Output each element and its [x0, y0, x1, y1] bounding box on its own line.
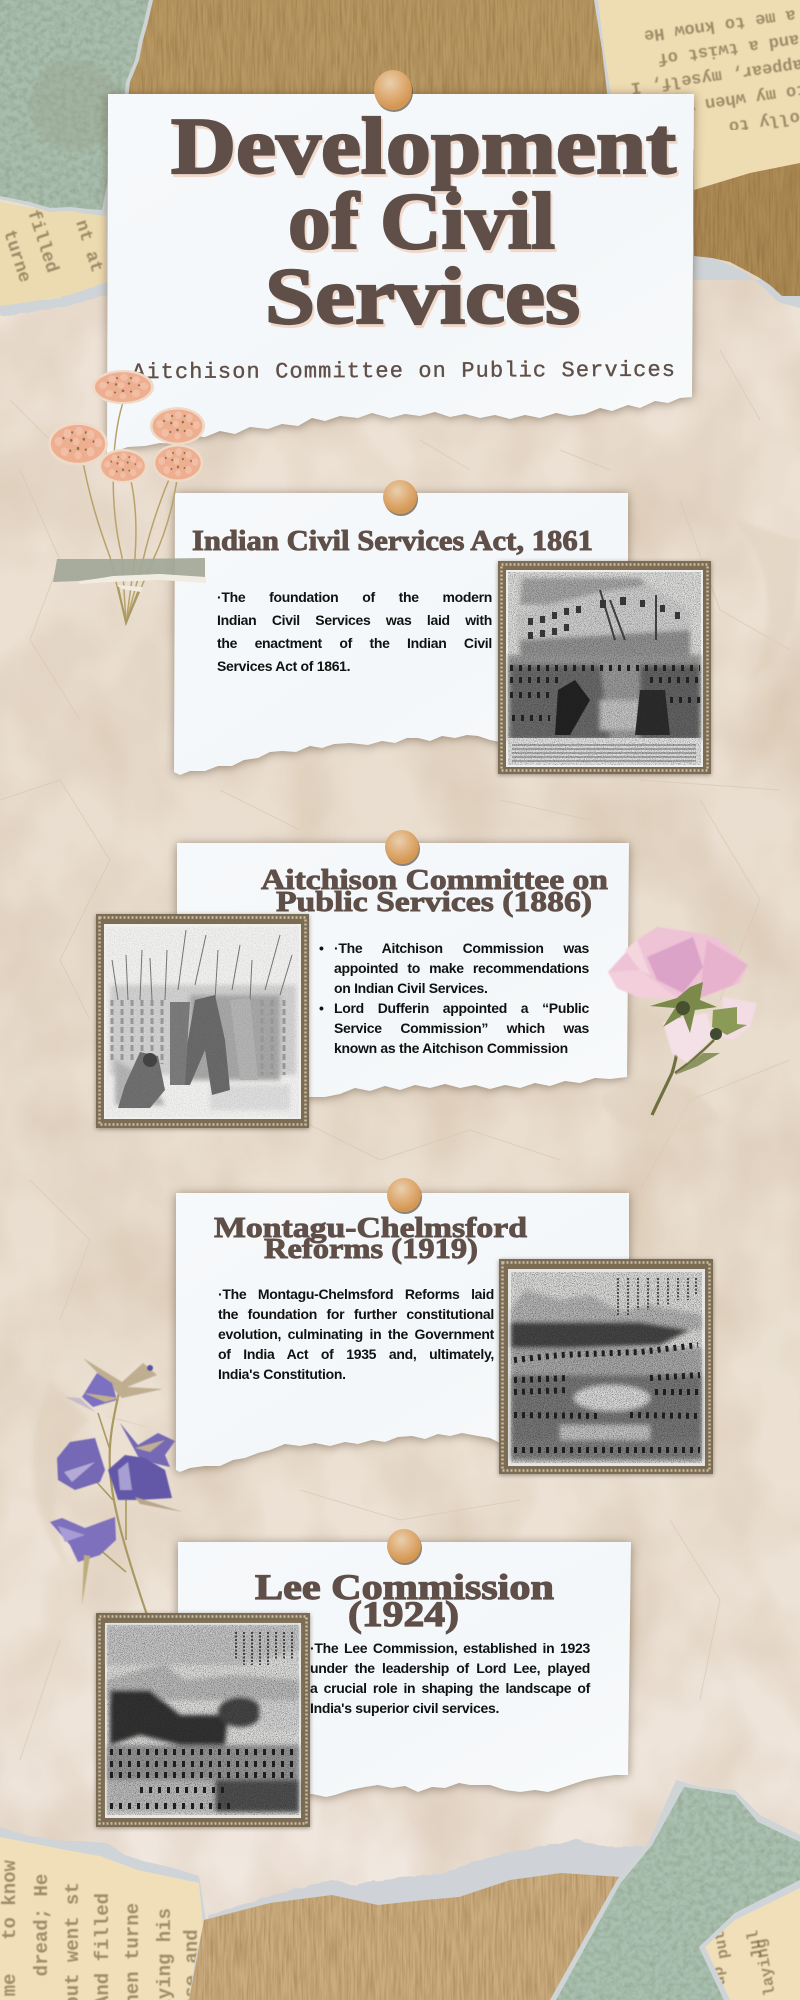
bullet one: ·The Aitchison Commission was: [334, 940, 589, 956]
heading: [255, 1567, 554, 1634]
body text: the foundation for further constitutional: [218, 1306, 494, 1322]
torn paper: title: [107, 94, 694, 453]
body text: Services Act of 1861.: [217, 658, 350, 674]
newspaper scrap: left: nt at: [70, 218, 106, 275]
stems: [93, 1388, 147, 1615]
body text: of India Act of 1935 and, ultimately,: [218, 1346, 494, 1362]
newspaper scrap: bottom right: put: [710, 1929, 733, 1960]
body text: ·The Lee Commission, established in 1923: [310, 1640, 590, 1656]
newspaper scrap: bottom left: dread; He: [31, 1874, 53, 1976]
heading: Development of Civil Services: Development: [171, 103, 676, 191]
body text: [319, 940, 589, 1056]
stems: [82, 397, 179, 623]
heading: Lee Commission: [255, 1567, 554, 1607]
torn paper: [178, 1542, 631, 1797]
sepals: [650, 982, 717, 1033]
icon: pin: [387, 1529, 422, 1565]
newspaper scrap: top right: [594, 0, 800, 150]
newspaper scrap: left: filled: [22, 208, 61, 275]
icon: pin: [385, 830, 420, 866]
panel: Aitchison Committee on Public Services (1886): [93, 830, 636, 1132]
heading: Development of Civil Services: of Civil: [288, 178, 555, 266]
panel: Montagu-Chelmsford Reforms (1919): [170, 1178, 716, 1478]
tape: [53, 558, 206, 592]
left blossom: [57, 1438, 105, 1490]
body text: known as the Aitchison Commission: [334, 1040, 568, 1056]
brown paper: top: [120, 0, 640, 110]
panel: Indian Civil Services Act, 1861: [168, 480, 714, 781]
body text: ·The Montagu-Chelmsford Reforms laid: [218, 1286, 494, 1302]
right blossom: [120, 1423, 175, 1467]
body text: [217, 589, 492, 674]
framed engraving: mountain procession: [96, 1613, 310, 1827]
centre blossoms: [108, 1455, 183, 1512]
newspaper scrap: bottom left: [0, 1827, 206, 2000]
body text: Service Commission” which was: [334, 1020, 589, 1036]
newspaper scrap: top right: a me to know He: [643, 4, 797, 44]
body text: India's superior civil services.: [310, 1700, 499, 1716]
torn paper: [176, 1193, 629, 1472]
heading: Montagu-Chelmsford: [214, 1212, 527, 1244]
framed engraving: soldiers: [96, 914, 309, 1128]
blossoms: [48, 370, 205, 483]
heading: (1924): [348, 1594, 459, 1634]
icon: pin: [383, 480, 418, 516]
brown paper: right edge: [690, 130, 800, 308]
panel: Aitchison Committee on Public Services (1886): •: [319, 1000, 324, 1016]
lower blossom: [50, 1517, 116, 1605]
framed engraving: street crowd: [498, 561, 711, 774]
body text: appointed to make recommendations: [334, 960, 589, 976]
body text: [218, 1286, 494, 1382]
petals: [608, 927, 757, 1063]
upper blossoms: [65, 1358, 163, 1429]
newspaper scrap: left: [0, 202, 110, 316]
panel: title: [100, 70, 700, 455]
body text: the enactment of the Indian Civil: [217, 635, 492, 651]
body text: on Indian Civil Services.: [334, 980, 488, 996]
newspaper scrap: bottom right: Jul: [744, 1929, 767, 1960]
torn paper: [177, 843, 629, 1100]
flower: pressed purple larkspur: [50, 1358, 182, 1613]
bud: [710, 1007, 747, 1040]
body text: a crucial role in shaping the landscape of: [310, 1680, 590, 1696]
panel: Aitchison Committee on Public Services (1886): •: [319, 940, 324, 956]
body text: [310, 1640, 590, 1716]
brown paper: bottom: [189, 1840, 650, 2000]
heading: Development of Civil Services: [171, 103, 676, 341]
subtitle: Aitchison Committee on Public Services: [132, 358, 675, 385]
newspaper scrap: top right: appear, myself, I: [629, 54, 800, 97]
body text: India's Constitution.: [218, 1366, 346, 1382]
green paper: bottom right: [550, 1780, 800, 2000]
heading: Indian Civil Services Act, 1861: [192, 526, 593, 557]
heading: Reforms (1919): [264, 1233, 478, 1265]
heading: [261, 864, 608, 918]
newspaper scrap: bottom right: laying: [752, 1937, 780, 1997]
rose stems: [652, 1017, 714, 1115]
flower: pressed wildflowers: [48, 370, 206, 626]
heading: Development of Civil Services: Services: [265, 253, 580, 341]
body text: ·The foundation of the modern: [217, 589, 492, 605]
newspaper scrap: bottom right: up: [709, 1965, 730, 1987]
body text: evolution, culminating in the Government: [218, 1326, 494, 1342]
newspaper scrap: bottom right: [699, 1880, 800, 2000]
panel: Lee Commission (1924): [93, 1529, 638, 1831]
newspaper scrap: top right: and a twist of: [656, 29, 800, 68]
icon: pin: [387, 1178, 422, 1214]
heading: Public Services (1886): [276, 886, 592, 918]
icon: pin: [374, 70, 413, 112]
torn paper: [174, 493, 628, 775]
flower: pressed pink rose: [608, 927, 757, 1116]
heading: Aitchison Committee on: [261, 864, 608, 896]
body text: under the leadership of Lord Lee, played: [310, 1660, 590, 1676]
body text: Indian Civil Services was laid with: [217, 612, 492, 628]
bullet two: Lord Dufferin appointed a “Public: [334, 1000, 589, 1016]
green paper: top left: [0, 0, 153, 216]
heading: [214, 1212, 527, 1265]
framed engraving: encampment: [499, 1259, 713, 1474]
